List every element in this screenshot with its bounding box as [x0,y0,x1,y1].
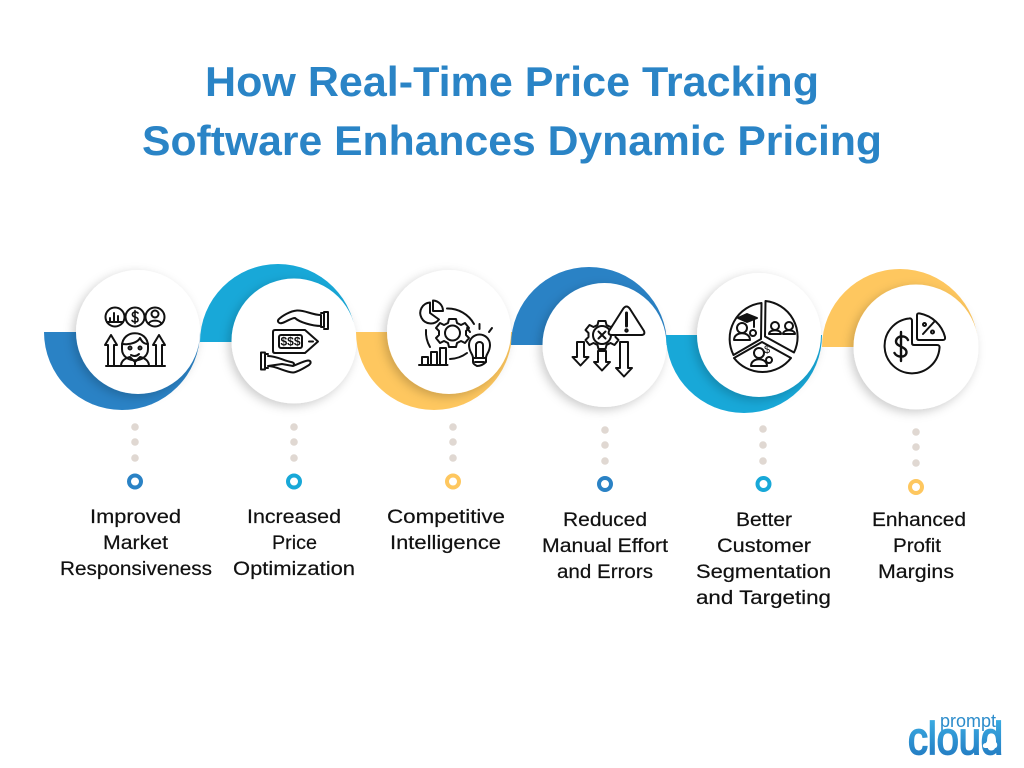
connector dots [449,423,457,462]
label: Price [272,533,317,554]
label: Profit [893,536,942,557]
ring marker [447,476,459,488]
half ring: cyan [666,335,822,413]
label: Enhanced [872,510,966,531]
logo word: prompt: prompt [940,711,996,731]
label [387,507,505,554]
icon: chart, gear and light bulb [419,300,492,366]
label: Reduced [563,510,647,531]
step 3: Competitive Intelligence [356,270,512,554]
half ring: blue [511,267,667,345]
icon: segmented customer pie: $ [764,344,770,356]
ring marker [910,481,922,493]
label: Manual Effort [542,536,669,557]
ring marker [758,478,770,490]
icon: gear, warning and down arrows [572,306,644,376]
label: and Errors [557,562,653,583]
ring marker [599,478,611,490]
icon: dollar pie with percent [885,313,945,373]
label: and Targeting [696,588,831,609]
logo word: cloud: cloud [908,713,1003,764]
title: How Real-Time Price Tracking [205,58,819,105]
step 5: Better Customer Segmentation and Targeting [666,273,831,609]
logo cloud mark [983,740,997,748]
half ring: yellow [356,332,512,410]
white circle [854,284,978,410]
step 6: Enhanced Profit Margins [822,269,978,583]
label: Segmentation [696,562,831,583]
step 1: Improved Market Responsiveness [44,270,212,580]
label: Customer [717,536,812,557]
half ring: cyan [200,264,356,342]
connector dots [912,428,920,467]
white circle [697,273,821,397]
half ring: yellow [822,269,978,347]
title: Software Enhances Dynamic Pricing [142,117,882,164]
label: Responsiveness [60,559,212,580]
label: Margins [878,562,954,583]
white circle [76,270,200,394]
icon: price tag between hands [261,310,328,372]
white circle [542,283,666,407]
label [233,507,355,580]
label [696,510,831,609]
label [60,507,212,580]
title [142,58,882,164]
label: Optimization [233,559,355,580]
label: Competitive [387,507,505,528]
white circle [232,278,356,404]
label: Market [103,533,169,554]
ring marker [288,476,300,488]
step 4: Reduced Manual Effort and Errors [511,267,669,583]
label [872,510,966,583]
white circle [387,270,511,394]
icon: businessman with rising arrows [105,308,165,366]
label: Improved [90,507,181,528]
ring marker [129,476,141,488]
connector dots [759,425,767,465]
connector dots [131,423,139,462]
label [542,510,669,583]
label: Intelligence [390,533,501,554]
label: Increased [247,507,341,528]
label: Better [736,510,793,531]
icon: segmented customer pie [730,301,798,372]
half ring: blue [44,332,200,410]
connector dots [601,426,609,465]
connector dots [290,423,298,462]
icon: price tag between hands: $$$ [280,336,301,348]
step 2: Increased Price Optimization [200,264,356,580]
logo: PromptCloud [908,711,1003,764]
